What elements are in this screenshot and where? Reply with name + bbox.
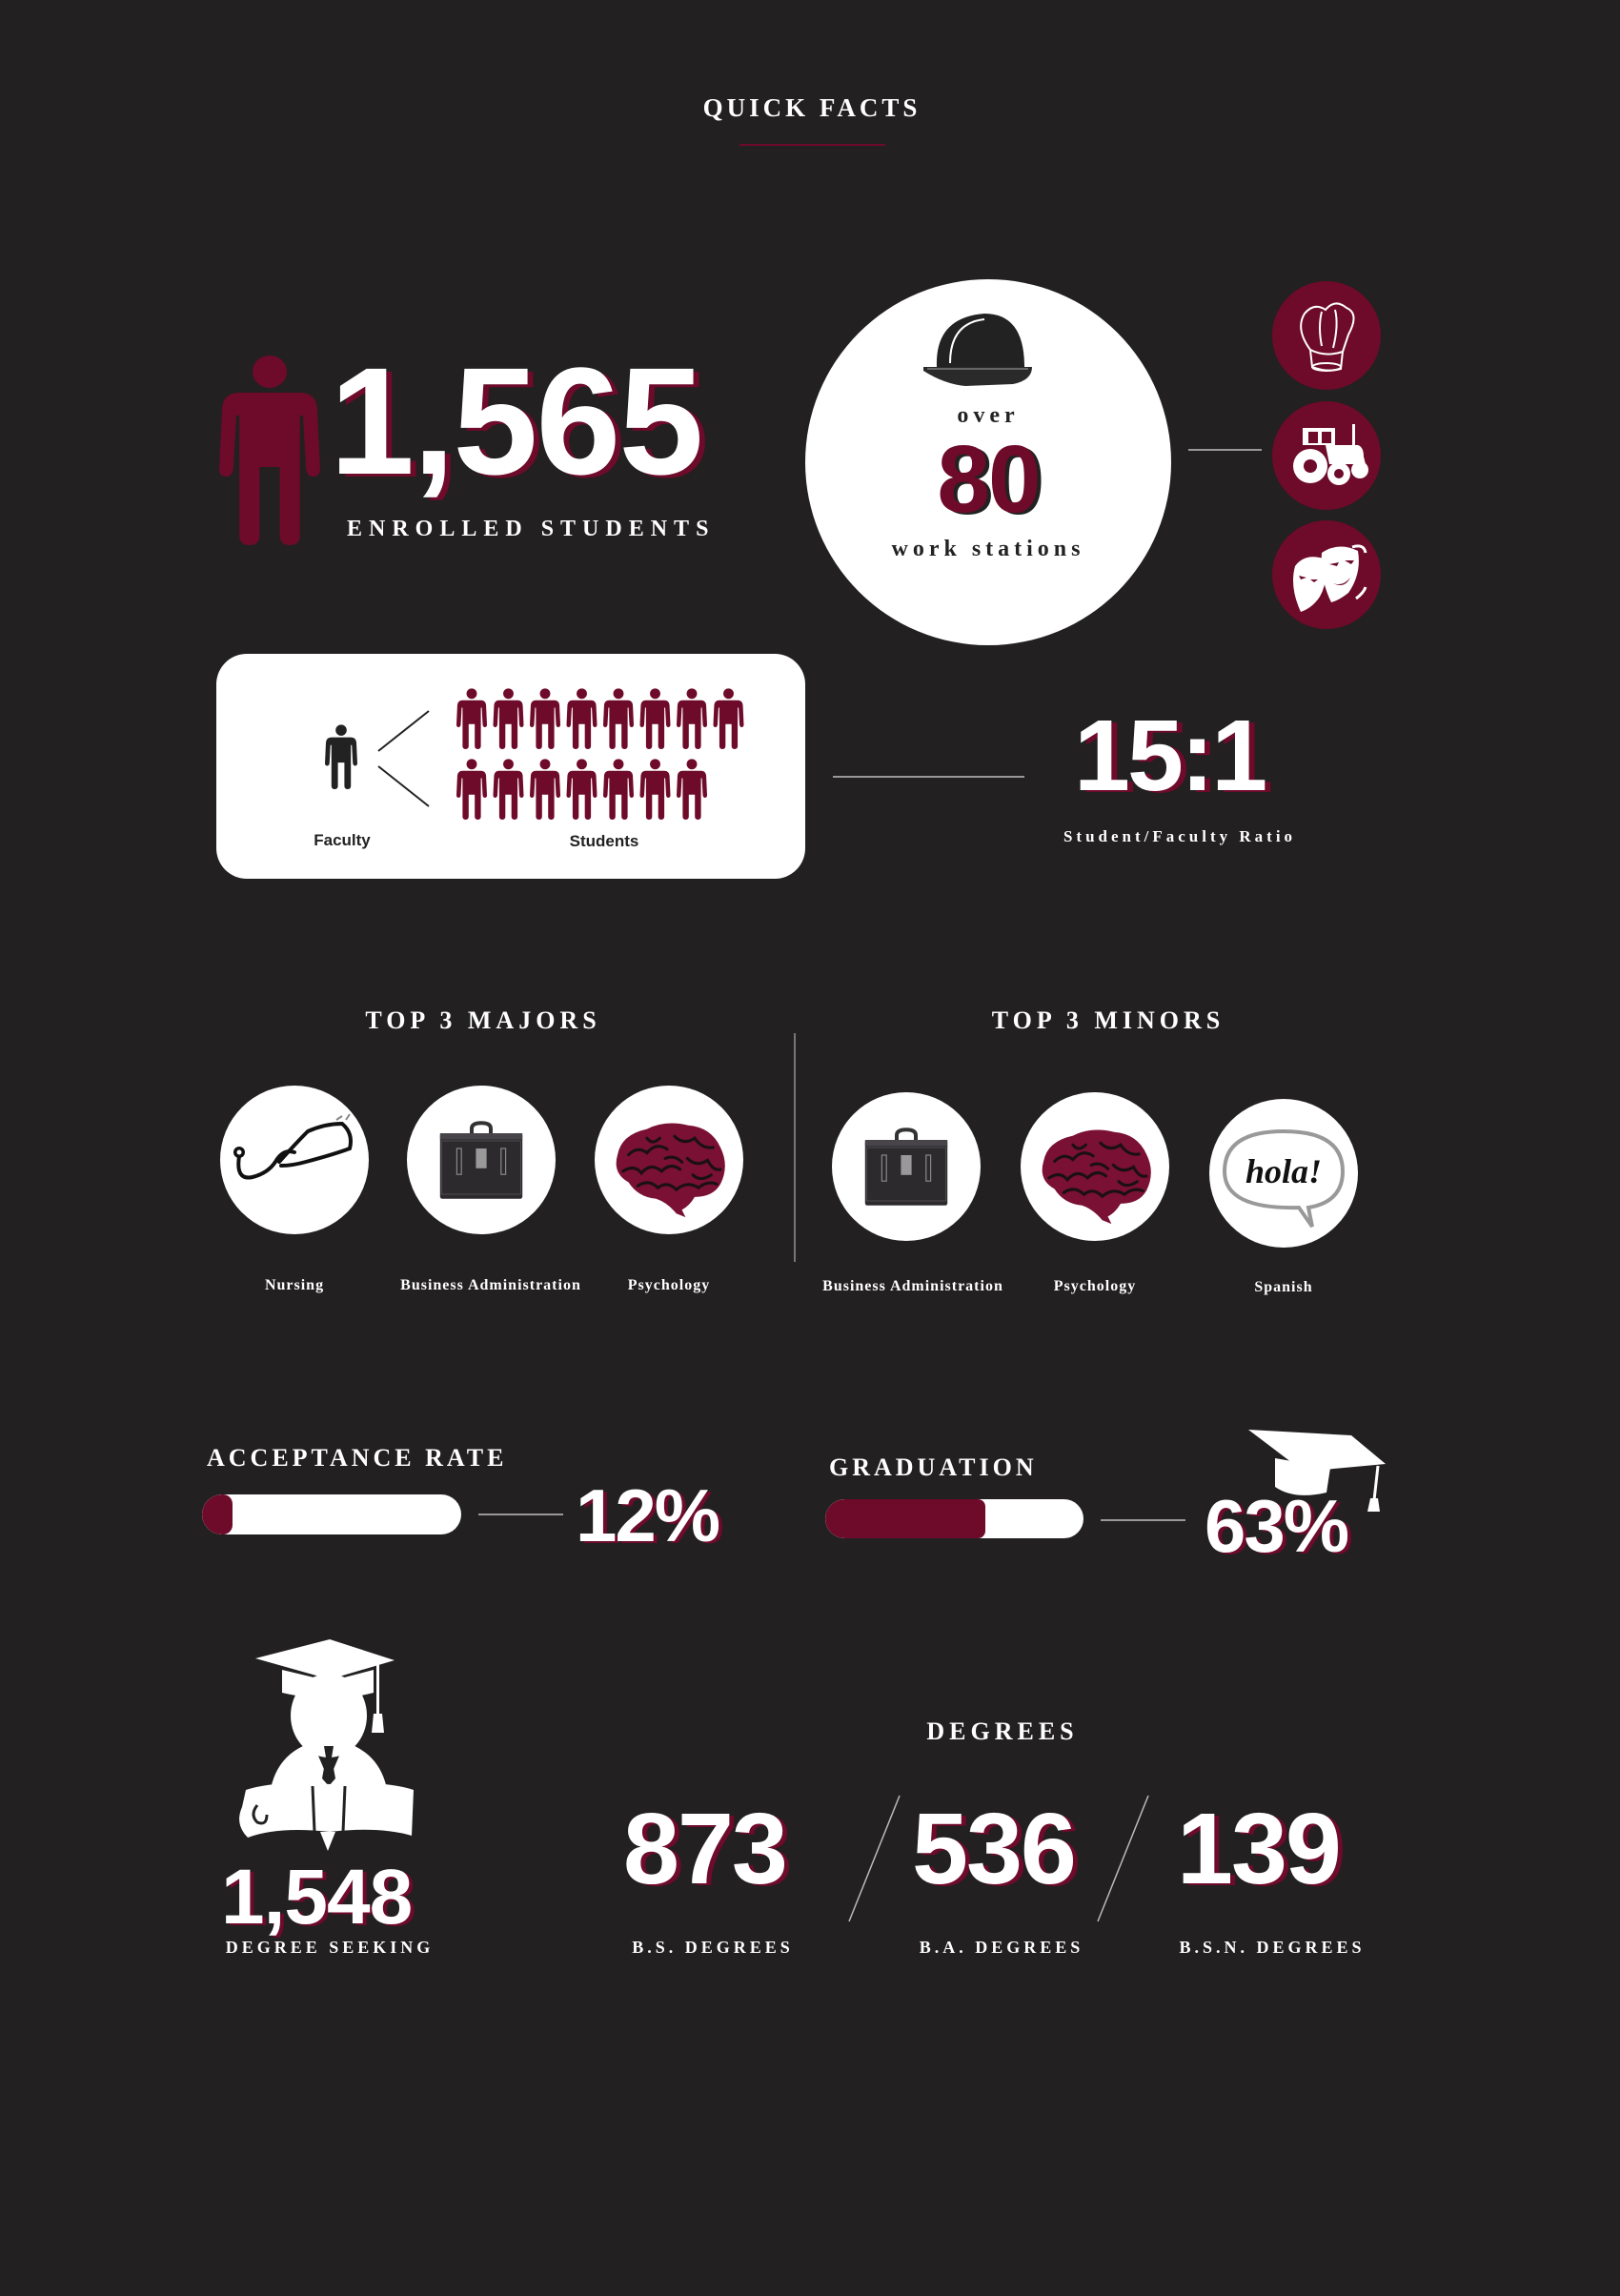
over text: over (957, 403, 1020, 428)
title underline (739, 144, 885, 146)
work stations circle (805, 279, 1171, 645)
connector line (833, 776, 1024, 778)
icon: faculty person (325, 724, 357, 789)
icon: minor psychology brain (1021, 1092, 1169, 1241)
heading: top 3 minors: TOP 3 MINORS (992, 1006, 1225, 1034)
heading: acceptance rate: ACCEPTANCE RATE (207, 1444, 507, 1472)
faculty label: Faculty (314, 831, 371, 849)
icon: tractor circle (1272, 401, 1381, 510)
degree seeking label: DEGREE SEEKING (226, 1938, 434, 1957)
title: QUICK FACTS (703, 93, 921, 122)
icon: business briefcase (407, 1086, 556, 1234)
bsn degrees number: 139 (1177, 1793, 1340, 1905)
graduation bar (825, 1499, 1083, 1538)
icon: students row (456, 688, 743, 820)
heading: graduation: GRADUATION (829, 1453, 1038, 1481)
slash divider 2 (1097, 1796, 1149, 1921)
icon: enrolled person (219, 356, 320, 545)
icon: spanish hola bubble: hola! (1245, 1152, 1322, 1190)
ratio number: 15:1 (1074, 700, 1265, 812)
slash divider 1 (848, 1796, 901, 1921)
connector line (1101, 1519, 1185, 1521)
graduation value: 63% (1205, 1484, 1347, 1568)
bs degrees number: 873 (623, 1793, 786, 1905)
heading: top 3 majors: TOP 3 MAJORS (365, 1006, 601, 1034)
icon: bracket lines (377, 710, 430, 807)
80 number: 80 (937, 426, 1040, 533)
label: nursing: Nursing (265, 1277, 324, 1293)
connector line (478, 1514, 563, 1515)
icon: graduate with diploma (239, 1639, 414, 1851)
panel: faculty student box (216, 654, 805, 879)
enrolled label: ENROLLED STUDENTS (347, 517, 715, 541)
icon: psychology brain (595, 1086, 743, 1234)
connector line (1188, 449, 1262, 451)
label: minor psychology: Psychology (1054, 1278, 1136, 1294)
degree seeking number: 1,548 (221, 1854, 412, 1940)
icon: nursing stethoscope (220, 1086, 369, 1234)
icon: chef hat circle (1272, 281, 1381, 390)
work stations label: work stations (891, 537, 1084, 561)
label: bsn degrees: B.S.N. DEGREES (1179, 1938, 1366, 1957)
enrolled number: 1,565 (330, 335, 701, 506)
label: business administration: Business Administration (400, 1277, 581, 1293)
label: psychology: Psychology (628, 1277, 710, 1293)
label: ba degrees: B.A. DEGREES (920, 1938, 1083, 1957)
icon: hard hat (923, 314, 1032, 386)
icon: graduation cap (1248, 1430, 1386, 1512)
icon: spanish hola bubble (1209, 1099, 1358, 1248)
ratio label: Student/Faculty Ratio (1063, 827, 1296, 845)
icon: minor business briefcase (832, 1092, 981, 1241)
label: bs degrees: B.S. DEGREES (632, 1938, 794, 1957)
label: spanish: Spanish (1254, 1279, 1313, 1295)
ba degrees number: 536 (912, 1793, 1075, 1905)
divider (794, 1033, 796, 1262)
acceptance value: 12% (576, 1473, 719, 1557)
icon: theatre masks circle (1272, 520, 1381, 629)
label: minor business administration: Business Administration (822, 1278, 1003, 1294)
acceptance bar (202, 1494, 461, 1534)
students label: Students (570, 832, 638, 850)
heading: degrees: DEGREES (926, 1717, 1079, 1745)
